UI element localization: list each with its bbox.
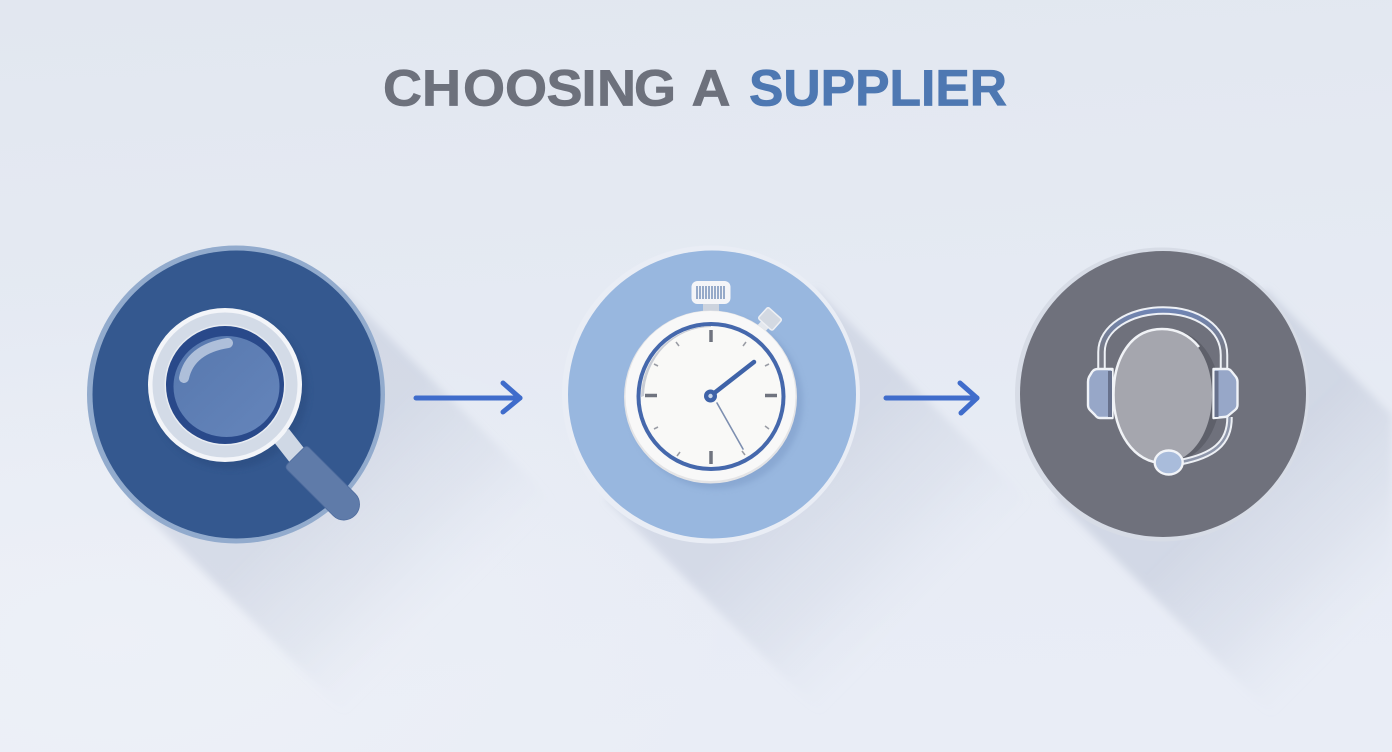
icon: magnifying glass xyxy=(148,308,366,526)
head outline xyxy=(1114,329,1199,463)
stopwatch side button xyxy=(752,307,782,338)
magnifier handle xyxy=(285,445,366,526)
head shadow xyxy=(1120,330,1220,462)
stopwatch crown xyxy=(692,281,730,314)
title xyxy=(383,60,1007,117)
arrow 2 xyxy=(886,383,977,413)
stopwatch tick marks xyxy=(645,330,777,464)
headband xyxy=(1102,310,1224,370)
step 1: search circle xyxy=(87,246,385,544)
stopwatch hands xyxy=(704,362,754,449)
circle 1 rim and disc xyxy=(87,246,385,544)
long shadow: circle 2 xyxy=(606,289,1035,718)
right ear cup xyxy=(1214,369,1238,418)
circle 3 rim and disc xyxy=(1015,248,1309,542)
step 2: stopwatch circle xyxy=(562,246,860,544)
microphone xyxy=(1155,450,1183,474)
long shadow: circle 1 xyxy=(131,289,560,718)
head shape xyxy=(1114,329,1212,463)
title: CHOOSING A xyxy=(383,60,731,117)
left ear cup xyxy=(1088,369,1112,418)
microphone boom xyxy=(1181,417,1230,462)
title: SUPPLIER xyxy=(749,60,1007,116)
icon: stopwatch xyxy=(624,281,803,489)
circle 2 rim and disc xyxy=(562,246,860,544)
step 3: support circle xyxy=(1015,248,1309,542)
long shadow: circle 3 xyxy=(1056,289,1392,719)
arrow 1 xyxy=(416,383,520,412)
icon: headset xyxy=(1088,310,1238,474)
